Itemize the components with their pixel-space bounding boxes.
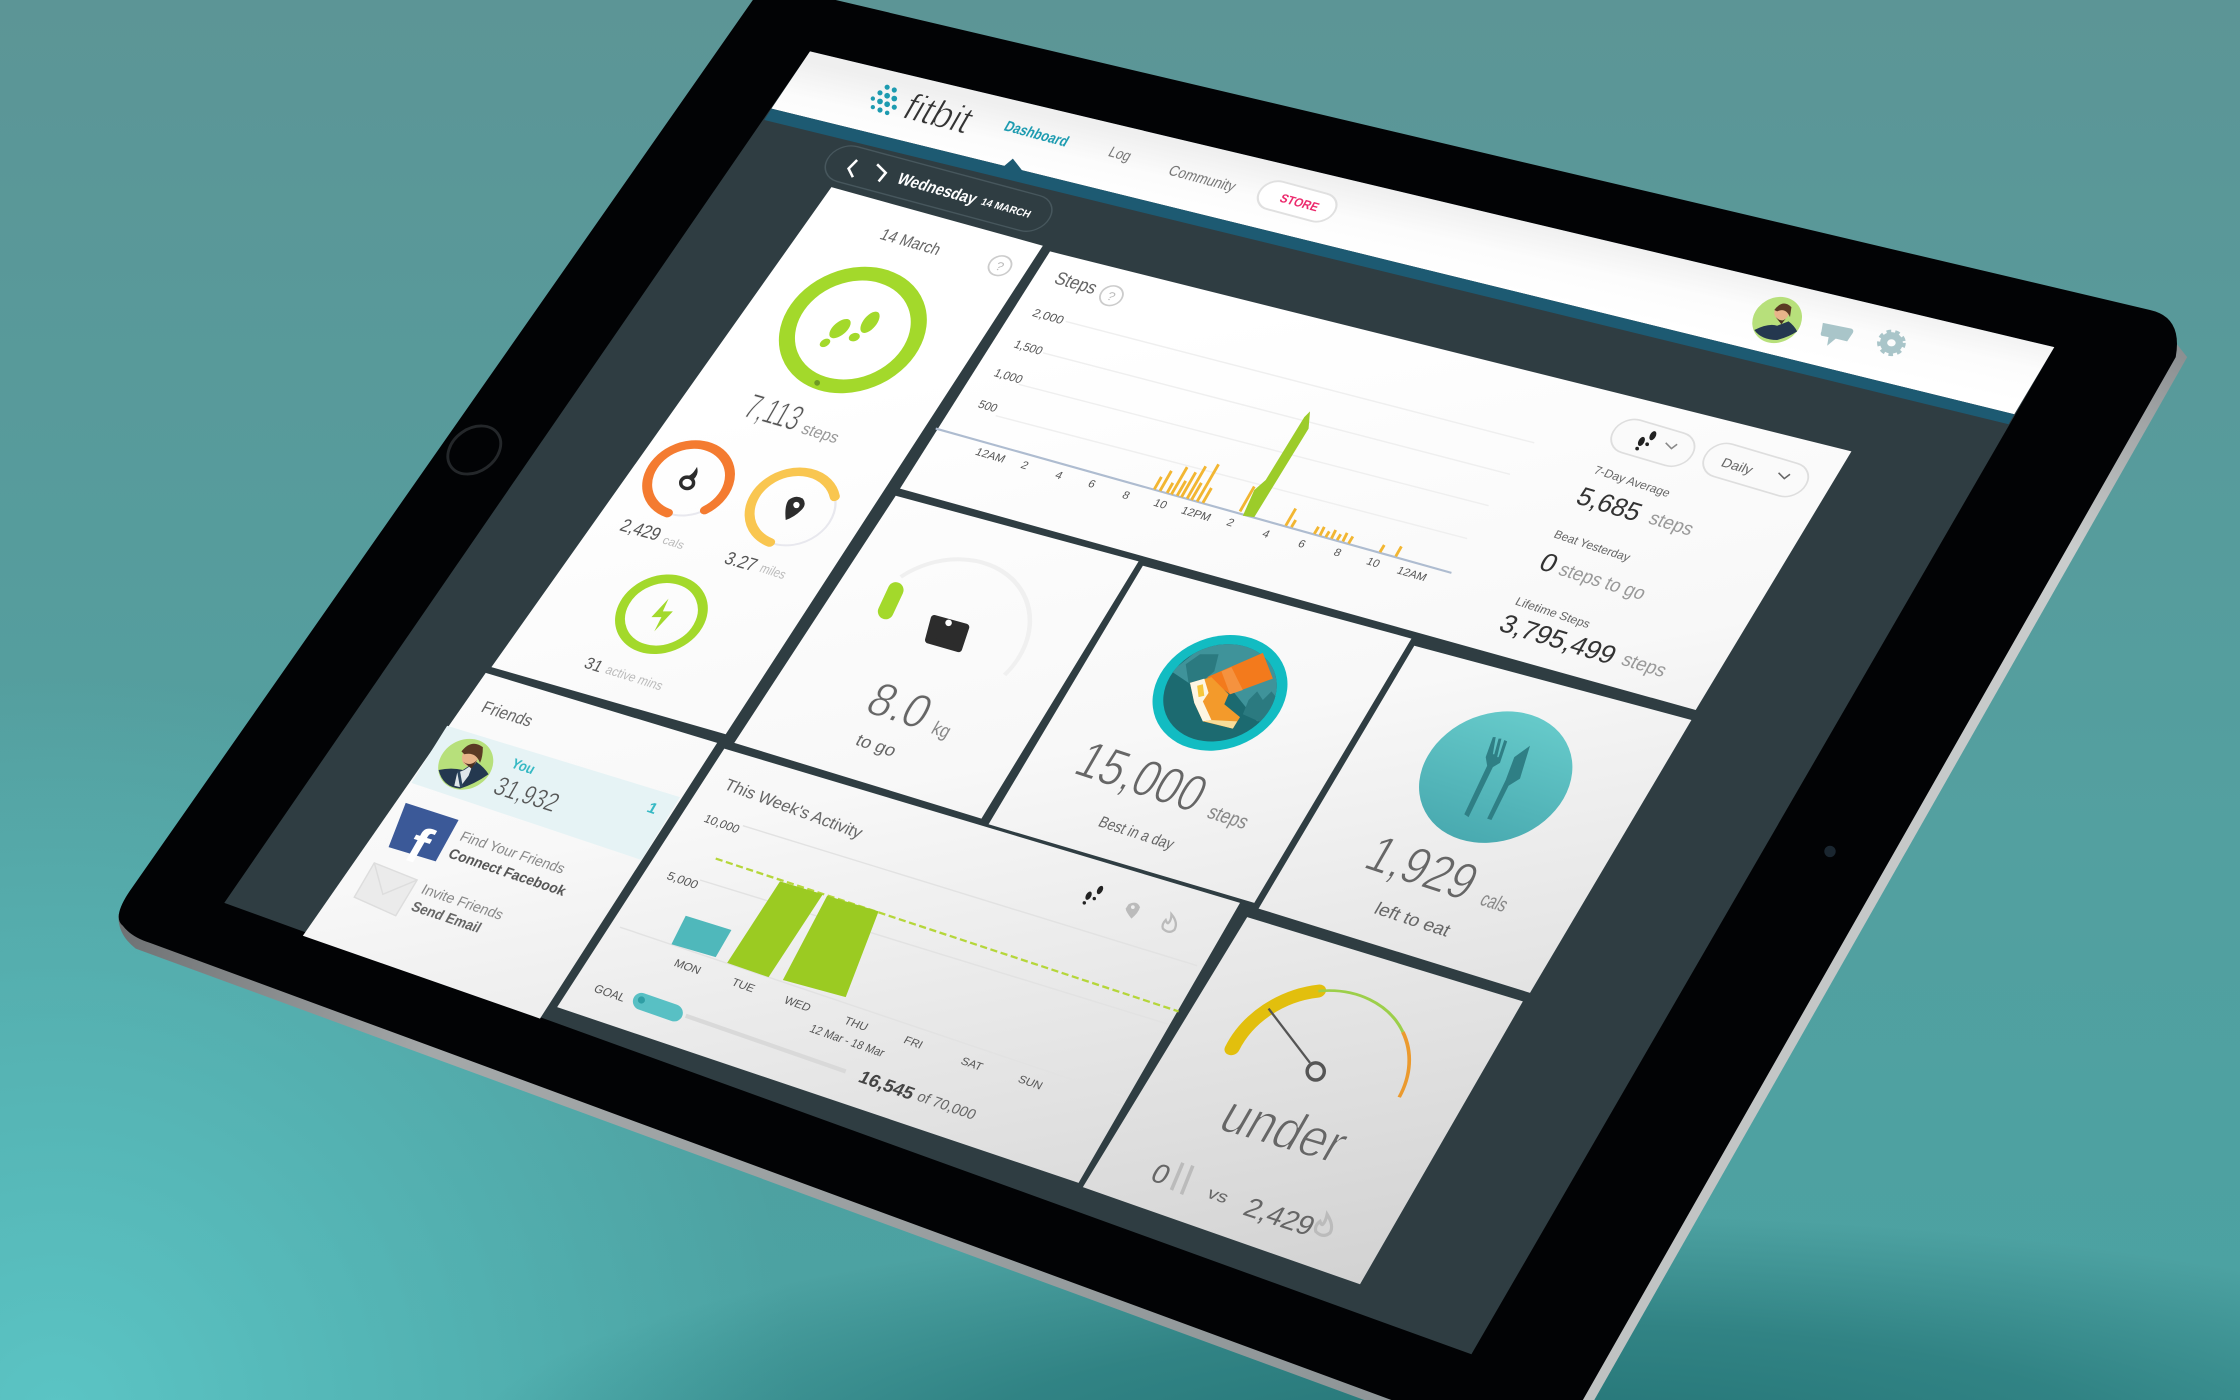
x axis labels: 4 <box>1053 470 1065 482</box>
icon: flame <box>681 470 697 489</box>
active minutes value <box>581 653 666 693</box>
grid lines <box>996 321 1534 539</box>
icon: envelope <box>354 863 417 916</box>
active minutes ring <box>606 569 717 659</box>
best steps value: 15,000 <box>1065 730 1218 823</box>
x axis labels: 12AM <box>973 447 1007 465</box>
x axis labels: 2 <box>1224 517 1236 529</box>
day labels: MON <box>672 958 703 977</box>
icon: facebook <box>389 803 459 874</box>
icon: fork and knife <box>1171 1163 1193 1194</box>
panel: best in a day <box>989 566 1411 903</box>
food value: cals <box>1476 888 1513 916</box>
home button <box>439 416 510 484</box>
help icon: ? <box>1104 289 1118 304</box>
bar: Wednesday <box>783 896 879 997</box>
day labels: SUN <box>1016 1074 1045 1092</box>
calories value: 2,429 <box>616 516 665 545</box>
logo dots <box>871 85 897 115</box>
icon: flame <box>1162 914 1176 932</box>
best steps value: steps <box>1203 801 1253 833</box>
metric icons <box>1083 885 1176 932</box>
header stripe <box>764 109 2014 424</box>
invite prompt: Send Email <box>408 899 484 936</box>
goal progress: 16,545 <box>855 1067 919 1103</box>
goal label: GOAL <box>591 982 628 1004</box>
day labels: THU <box>842 1015 870 1034</box>
distance ring <box>735 462 843 555</box>
versus label: vs <box>1204 1183 1233 1207</box>
gauge <box>1232 969 1442 1102</box>
stat: beat yesterday: steps to go <box>1555 559 1650 604</box>
calories burned: 2,429 <box>1238 1193 1320 1242</box>
best caption: Best in a day <box>1095 814 1178 853</box>
summary date: 14 March <box>877 225 944 259</box>
day labels: SAT <box>958 1056 985 1073</box>
calories value <box>616 516 687 552</box>
stat: lifetime steps: 3,795,499 <box>1494 608 1622 670</box>
facebook prompt: Connect Facebook <box>445 846 570 900</box>
nav: Dashboard: Dashboard <box>1001 119 1072 150</box>
gauge marker <box>886 590 896 611</box>
distance value <box>720 549 789 582</box>
invite prompt: Invite Friends <box>418 882 507 923</box>
goal dashed line <box>716 859 1179 1011</box>
x axis labels: 6 <box>1085 478 1098 491</box>
header bar <box>771 51 2054 414</box>
y axis labels: 500 <box>976 398 1001 415</box>
selector: daily: Daily <box>1718 455 1756 477</box>
panel: weight goal <box>734 496 1139 819</box>
camera <box>1824 846 1836 857</box>
x axis labels: 8 <box>1331 547 1343 559</box>
help icon <box>984 253 1016 278</box>
icon: scale <box>929 619 966 649</box>
date text: Wednesday <box>894 169 982 208</box>
avatar <box>429 729 503 800</box>
icon: lightning bolt <box>651 599 673 631</box>
icon: fork and knife <box>1464 737 1530 820</box>
badge: shoe <box>1152 635 1288 751</box>
stat: 7-day average <box>1571 463 1698 540</box>
icon: footprints <box>818 308 883 349</box>
panel: daily summary <box>491 187 1043 734</box>
selector: daily <box>1696 439 1815 501</box>
weight value: 8.0 <box>857 672 942 739</box>
chart baseline <box>936 429 1451 573</box>
steps ring <box>764 259 942 401</box>
date small text: 14 MARCH <box>979 196 1033 220</box>
food eaten: 0 <box>1145 1158 1176 1191</box>
icon: pin <box>1126 903 1140 919</box>
day labels: TUE <box>729 977 757 995</box>
distance value: 3.27 <box>720 549 761 576</box>
icon: flame <box>1315 1214 1332 1235</box>
icon: steps <box>1083 885 1105 905</box>
weight gauge arc <box>869 543 1059 676</box>
logo wordmark: fitbit <box>896 87 981 141</box>
bar: Tuesday <box>727 881 823 977</box>
date range: 12 Mar - 18 Mar <box>807 1022 887 1059</box>
food value: 1,929 <box>1355 825 1489 911</box>
y axis labels: 10,000 <box>701 812 742 836</box>
food circle <box>1392 694 1599 861</box>
day labels: WED <box>782 995 813 1014</box>
stat: lifetime steps: steps <box>1617 649 1671 681</box>
panel: calorie balance <box>1083 917 1523 1284</box>
user avatar <box>1744 288 1810 352</box>
x axis labels <box>973 447 1429 584</box>
stat: lifetime steps <box>1494 595 1671 681</box>
y axis labels: 1,000 <box>991 366 1026 386</box>
help icon: ? <box>993 259 1007 274</box>
rank: 1 <box>644 800 661 818</box>
y axis labels: 5,000 <box>664 869 701 892</box>
stat: beat yesterday: Beat Yesterday <box>1551 528 1634 564</box>
nav: Log: Log <box>1105 144 1134 165</box>
balance word: under <box>1209 1084 1359 1175</box>
y axis labels <box>664 812 742 892</box>
panel: friends <box>303 673 717 1019</box>
y axis labels: 2,000 <box>1030 306 1067 327</box>
stat: 7-day average: 5,685 <box>1571 481 1648 527</box>
icon: facebook: f <box>395 818 442 874</box>
screen dark background <box>224 51 2054 1354</box>
nav pointer <box>1003 159 1023 171</box>
calories ring <box>633 435 744 525</box>
y axis labels <box>976 306 1067 415</box>
facebook prompt <box>445 829 570 900</box>
x axis labels: 4 <box>1260 528 1272 541</box>
stat: 7-day average: steps <box>1645 508 1698 540</box>
icon: chat <box>1821 323 1853 346</box>
goal progress <box>855 1067 979 1123</box>
panel: weekly activity <box>557 749 1240 1183</box>
food eaten <box>1145 1158 1193 1194</box>
yellow step bars <box>1154 464 1401 556</box>
weight caption: to go <box>852 730 900 760</box>
stat: beat yesterday: 0 <box>1534 547 1564 578</box>
panel: steps chart <box>900 251 1851 710</box>
weight value: kg <box>928 718 955 743</box>
distance value: miles <box>757 561 789 582</box>
your score: 31,932 <box>488 771 565 817</box>
calories value: cals <box>660 533 687 552</box>
active minutes value: active mins <box>603 662 666 693</box>
gauge: yellow arc <box>1232 976 1318 1063</box>
x axis labels: 12AM <box>1394 565 1429 584</box>
screen <box>224 51 2054 1354</box>
day labels <box>672 958 1045 1092</box>
x axis labels: 2 <box>1018 460 1030 472</box>
navigation <box>1001 119 1342 225</box>
x axis labels: 10 <box>1151 498 1169 512</box>
day labels: FRI <box>901 1035 925 1051</box>
icon: location pin <box>785 497 805 520</box>
stat: beat yesterday <box>1534 528 1650 604</box>
help icon <box>1096 283 1127 308</box>
panel: food <box>1259 646 1691 993</box>
gauge: orange arc <box>1371 1032 1431 1097</box>
steps count: 7,113 <box>737 387 811 438</box>
friends heading: Friends <box>478 698 537 730</box>
stat: lifetime steps: Lifetime Steps <box>1513 595 1593 631</box>
goal slider <box>638 996 846 1071</box>
facebook prompt: Find Your Friends <box>457 829 568 877</box>
x axis labels: 10 <box>1364 556 1382 570</box>
date selector <box>818 141 1059 236</box>
you label: You <box>508 756 538 778</box>
gauge needle <box>1269 1009 1324 1080</box>
steps count: steps <box>798 420 843 447</box>
x axis labels: 12PM <box>1179 505 1213 524</box>
store button: STORE <box>1277 191 1322 214</box>
week heading: This Week's Activity <box>721 775 867 842</box>
x axis labels: 6 <box>1295 538 1308 551</box>
nav: Community: Community <box>1165 163 1239 195</box>
selector: activity <box>1604 415 1702 471</box>
grid lines <box>620 826 1197 1097</box>
x axis labels: 8 <box>1120 490 1132 502</box>
green peak bar <box>1243 411 1310 517</box>
active minutes value: 31 <box>581 653 607 676</box>
highlighted row <box>411 726 680 860</box>
invite prompt <box>408 882 507 936</box>
y axis labels: 1,500 <box>1011 338 1046 358</box>
steps heading: Steps <box>1050 269 1101 299</box>
goal progress: of 70,000 <box>914 1089 979 1123</box>
previous and next chevrons <box>849 160 886 181</box>
icon: settings gear <box>1879 331 1904 354</box>
stat: 7-day average: 7-Day Average <box>1591 463 1673 500</box>
store button <box>1252 178 1342 225</box>
gauge: green arc <box>1312 983 1414 1032</box>
logo: fitbit <box>871 85 981 141</box>
bar: Monday <box>671 916 731 957</box>
food caption: left to eat <box>1371 898 1455 941</box>
